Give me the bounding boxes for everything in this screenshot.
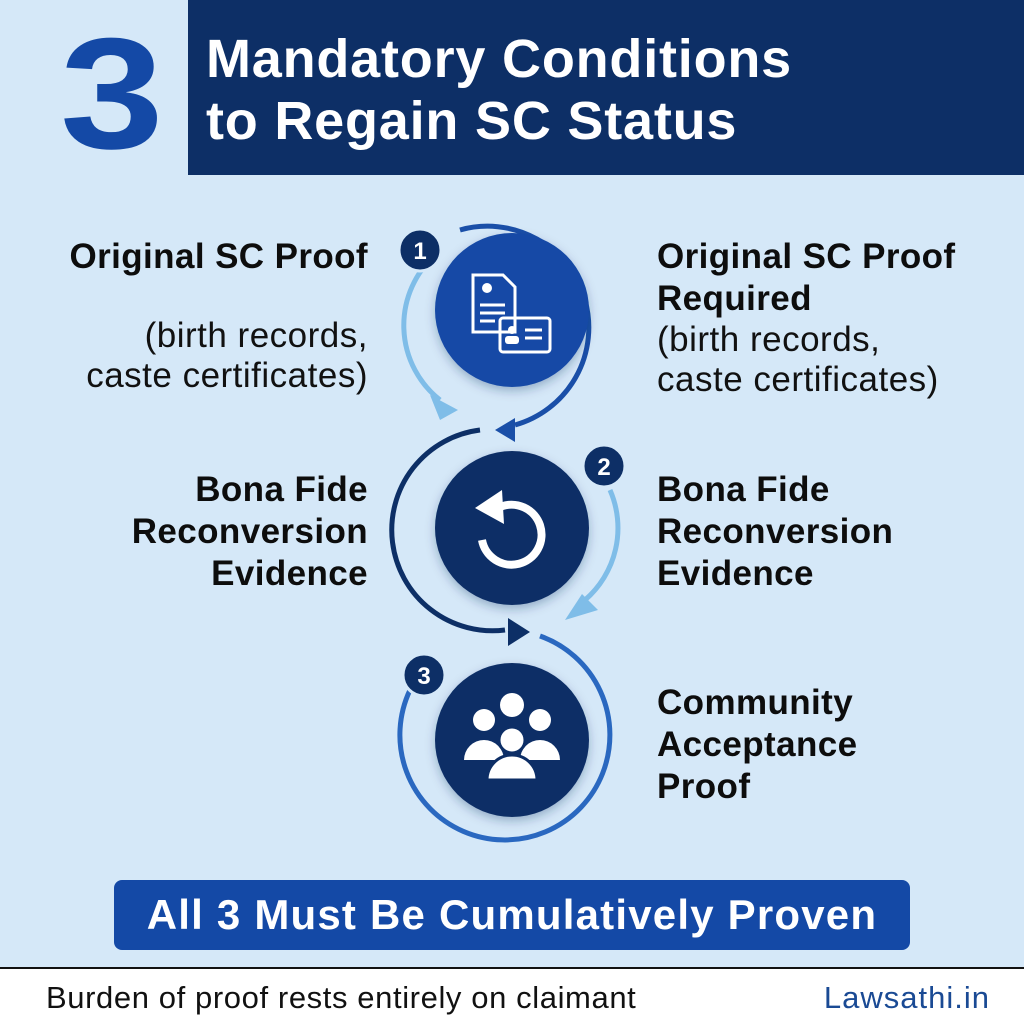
arrows step 1 xyxy=(404,226,589,442)
right text 2 xyxy=(657,470,893,593)
title banner xyxy=(188,0,1024,175)
badge 3: 3 xyxy=(417,663,431,690)
footer: Burden of proof rests entirely on claimant xyxy=(46,980,636,1015)
badge 2 xyxy=(583,445,625,487)
badge 3 xyxy=(403,654,445,696)
circle 2 with reconversion icon xyxy=(435,451,589,605)
left text 1: caste certificates) xyxy=(86,356,368,395)
right text 3: Acceptance xyxy=(657,725,857,764)
arrows step 2 xyxy=(392,430,618,646)
right text 3: Community xyxy=(657,683,853,722)
right text 1: Original SC Proof xyxy=(657,237,956,276)
badge 1 xyxy=(399,229,441,271)
right text 1: (birth records, xyxy=(657,320,880,359)
right text 3 xyxy=(657,683,857,806)
right text 1: caste certificates) xyxy=(657,360,939,399)
circle 3 with community icon xyxy=(435,663,589,817)
badge 1: 1 xyxy=(413,238,427,265)
left text 2: Bona Fide xyxy=(195,470,368,509)
arrows step 3 xyxy=(400,636,610,840)
left text 2: Evidence xyxy=(211,554,368,593)
right text 2: Reconversion xyxy=(657,512,893,551)
right text 2: Bona Fide xyxy=(657,470,830,509)
left text 1: (birth records, xyxy=(145,316,368,355)
callout button xyxy=(114,880,910,950)
badge 2: 2 xyxy=(597,454,611,481)
right text 2: Evidence xyxy=(657,554,814,593)
callout button: All 3 Must Be Cumulatively Proven xyxy=(147,891,877,938)
footer: Lawsathi.in xyxy=(824,980,990,1015)
left text 1 xyxy=(70,237,368,395)
right text 1 xyxy=(657,237,956,399)
title banner: to Regain SC Status xyxy=(206,91,737,151)
circle 1 with document icon xyxy=(435,233,589,387)
left text 1: Original SC Proof xyxy=(70,237,368,276)
big number 3: 3 xyxy=(60,6,164,182)
right text 1: Required xyxy=(657,279,812,318)
left text 2: Reconversion xyxy=(132,512,368,551)
right text 3: Proof xyxy=(657,767,750,806)
footer xyxy=(0,967,1024,1024)
title banner: Mandatory Conditions xyxy=(206,29,792,89)
left text 2 xyxy=(132,470,368,593)
